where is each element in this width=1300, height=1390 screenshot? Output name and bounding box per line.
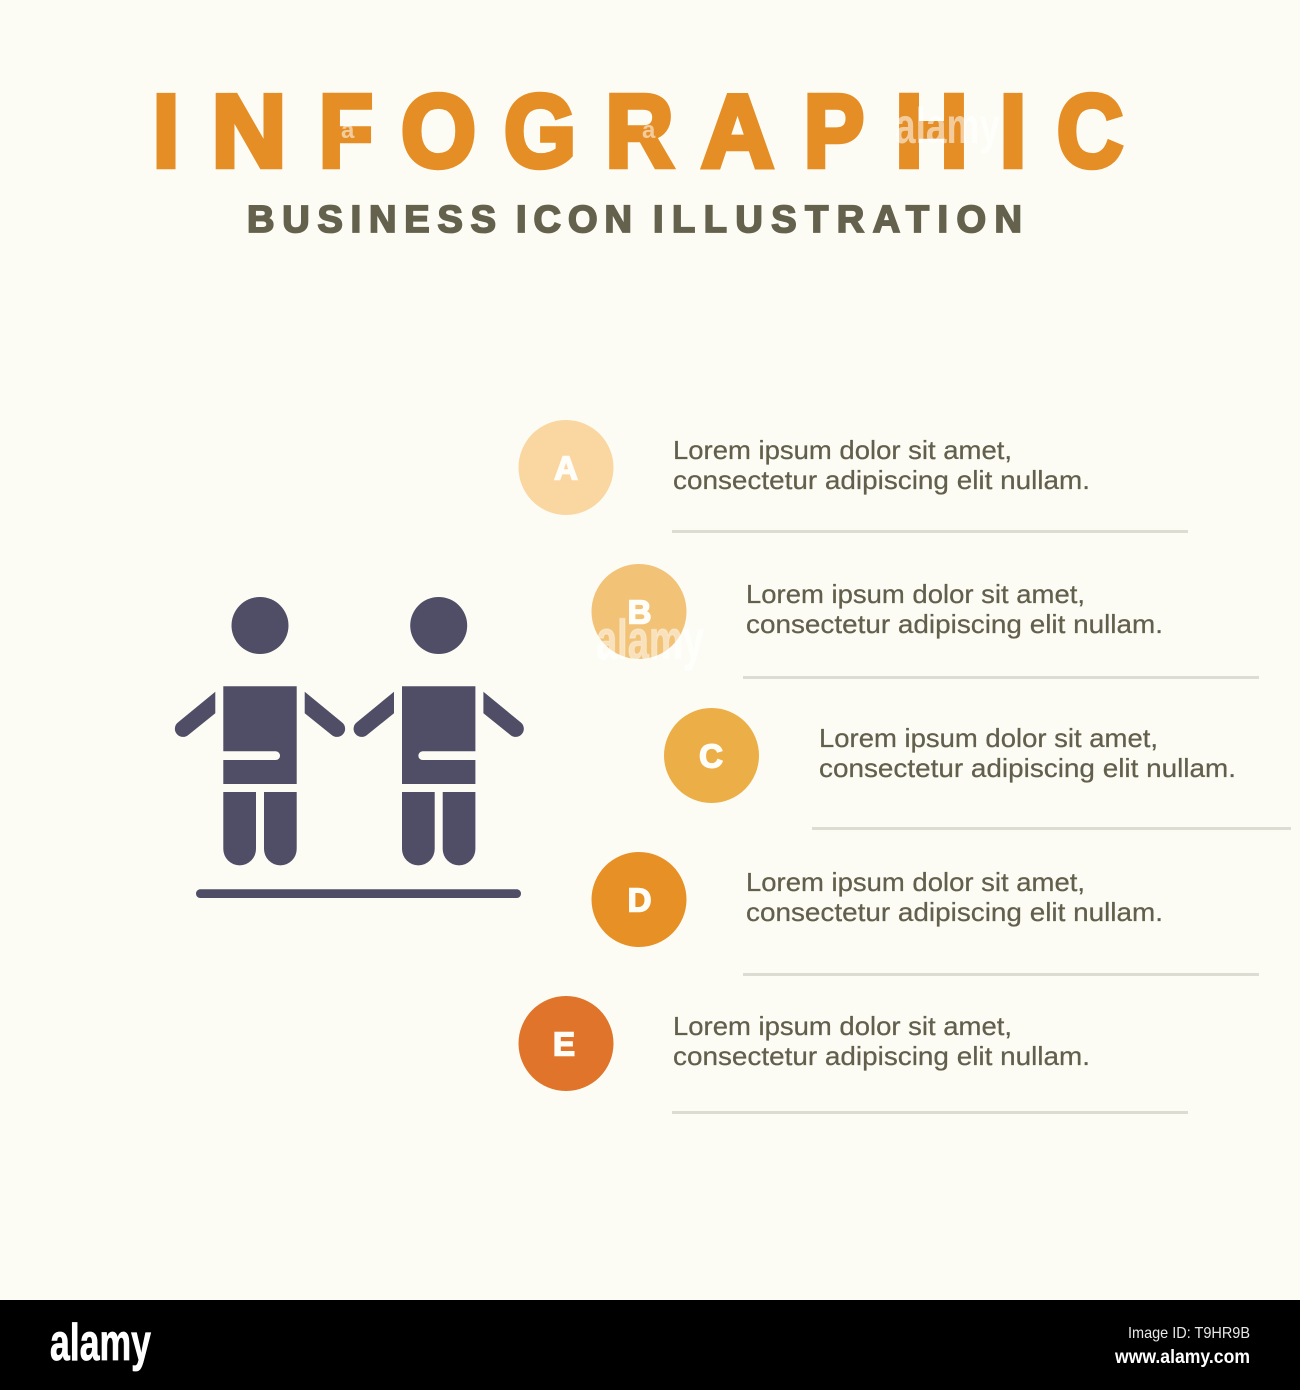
title: O	[401, 73, 476, 189]
text D: Lorem ipsum dolor sit amet,	[746, 867, 1085, 897]
person left	[175, 597, 345, 865]
person right	[354, 597, 524, 865]
text C	[819, 723, 1236, 783]
text E: Lorem ipsum dolor sit amet,	[673, 1011, 1012, 1041]
text E	[673, 1011, 1090, 1071]
footer logo: alamy	[50, 1314, 151, 1372]
title: R	[605, 72, 674, 188]
title: G	[504, 73, 576, 188]
circle A	[518, 420, 614, 515]
circle C	[664, 708, 759, 803]
title watermark: alamy	[895, 98, 1000, 154]
footer bar	[0, 1300, 1300, 1390]
text D	[746, 867, 1163, 927]
item E	[518, 996, 1188, 1114]
title watermark: a	[341, 117, 355, 144]
title: N	[212, 73, 286, 188]
subtitle: ILLUSTRATION	[653, 199, 1022, 241]
letter A: A	[554, 450, 578, 486]
image id: Image ID: T9HR9B	[1128, 1325, 1250, 1342]
text A	[673, 435, 1090, 495]
subtitle: ICON	[516, 199, 632, 241]
title watermark	[341, 98, 1000, 154]
circle B	[592, 564, 686, 659]
title: H	[895, 72, 968, 189]
title: F	[319, 74, 373, 189]
text A: Lorem ipsum dolor sit amet,	[673, 435, 1012, 465]
title	[153, 72, 1123, 189]
icon: two people holding hands	[175, 597, 524, 898]
text A: consectetur adipiscing elit nullam.	[673, 465, 1090, 495]
watermark over circle B: alamy	[596, 608, 704, 671]
letter D: D	[628, 882, 651, 918]
letter B: B	[628, 594, 651, 630]
subtitle	[247, 199, 1022, 241]
title: A	[701, 73, 774, 189]
circle D	[592, 852, 686, 947]
circle E	[518, 996, 614, 1091]
title: I	[1000, 73, 1026, 189]
item B	[592, 564, 1259, 679]
title: I	[153, 73, 179, 189]
text B: Lorem ipsum dolor sit amet,	[746, 579, 1085, 609]
title: P	[804, 73, 864, 189]
text C: consectetur adipiscing elit nullam.	[819, 753, 1236, 783]
letter C: C	[699, 738, 723, 774]
item D	[592, 852, 1259, 976]
text C: Lorem ipsum dolor sit amet,	[819, 723, 1158, 753]
title watermark: a	[642, 117, 656, 144]
text D: consectetur adipiscing elit nullam.	[746, 897, 1163, 927]
subtitle: BUSINESS	[247, 199, 496, 241]
text E: consectetur adipiscing elit nullam.	[673, 1041, 1090, 1071]
title: C	[1057, 73, 1123, 189]
text B	[746, 579, 1163, 639]
website: www.alamy.com	[1114, 1347, 1250, 1368]
text B: consectetur adipiscing elit nullam.	[746, 609, 1163, 639]
item A	[518, 420, 1188, 533]
ground line	[196, 889, 521, 898]
item C	[664, 708, 1291, 830]
letter E: E	[553, 1026, 575, 1062]
